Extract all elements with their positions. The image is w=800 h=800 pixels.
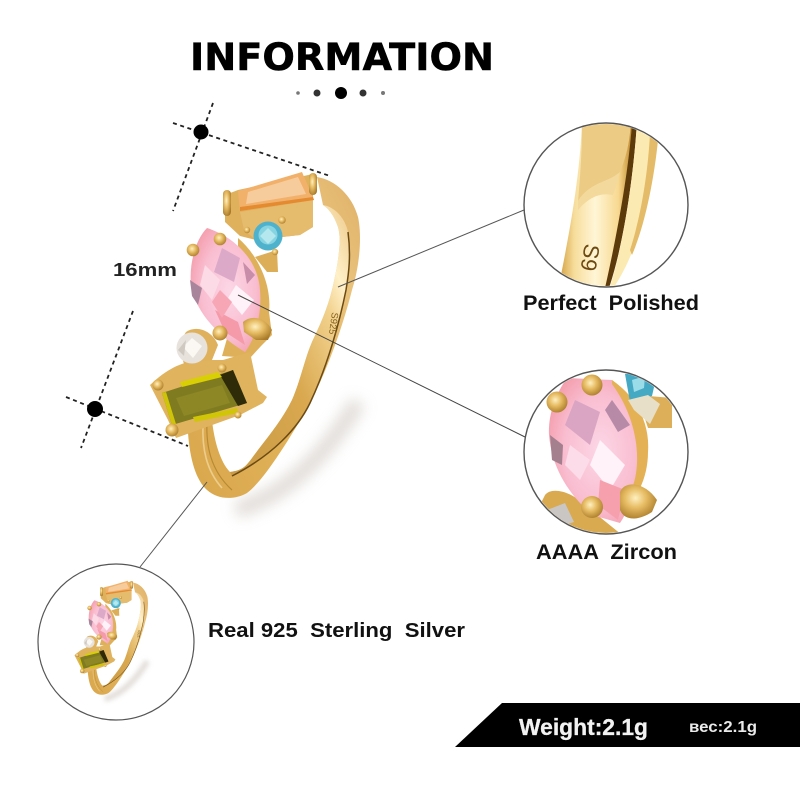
connector: silver xyxy=(140,482,207,567)
weight banner xyxy=(455,703,800,747)
dimension marker: bottom xyxy=(66,311,188,448)
title dots xyxy=(296,87,385,99)
detail label: zircon: AAAA Zircon xyxy=(536,541,677,564)
weight banner: Weight:2.1g xyxy=(519,714,648,740)
detail circle: zircon stone xyxy=(524,370,688,540)
weight banner: вес:2.1g xyxy=(689,719,757,736)
ring main image xyxy=(150,172,360,510)
title: INFORMATION xyxy=(190,36,494,79)
detail circle: polished band xyxy=(524,120,688,290)
dimension label: 16mm xyxy=(113,259,177,280)
detail circle: polished band: S9 xyxy=(575,242,605,273)
detail label: silver: Real 925 Sterling Silver xyxy=(208,619,465,642)
detail label: polished: Perfect Polished xyxy=(523,292,699,315)
connector: polished xyxy=(338,210,524,287)
thumbnail circle: full ring xyxy=(38,564,194,720)
dimension marker: top xyxy=(173,103,330,211)
connector: zircon xyxy=(238,295,525,437)
